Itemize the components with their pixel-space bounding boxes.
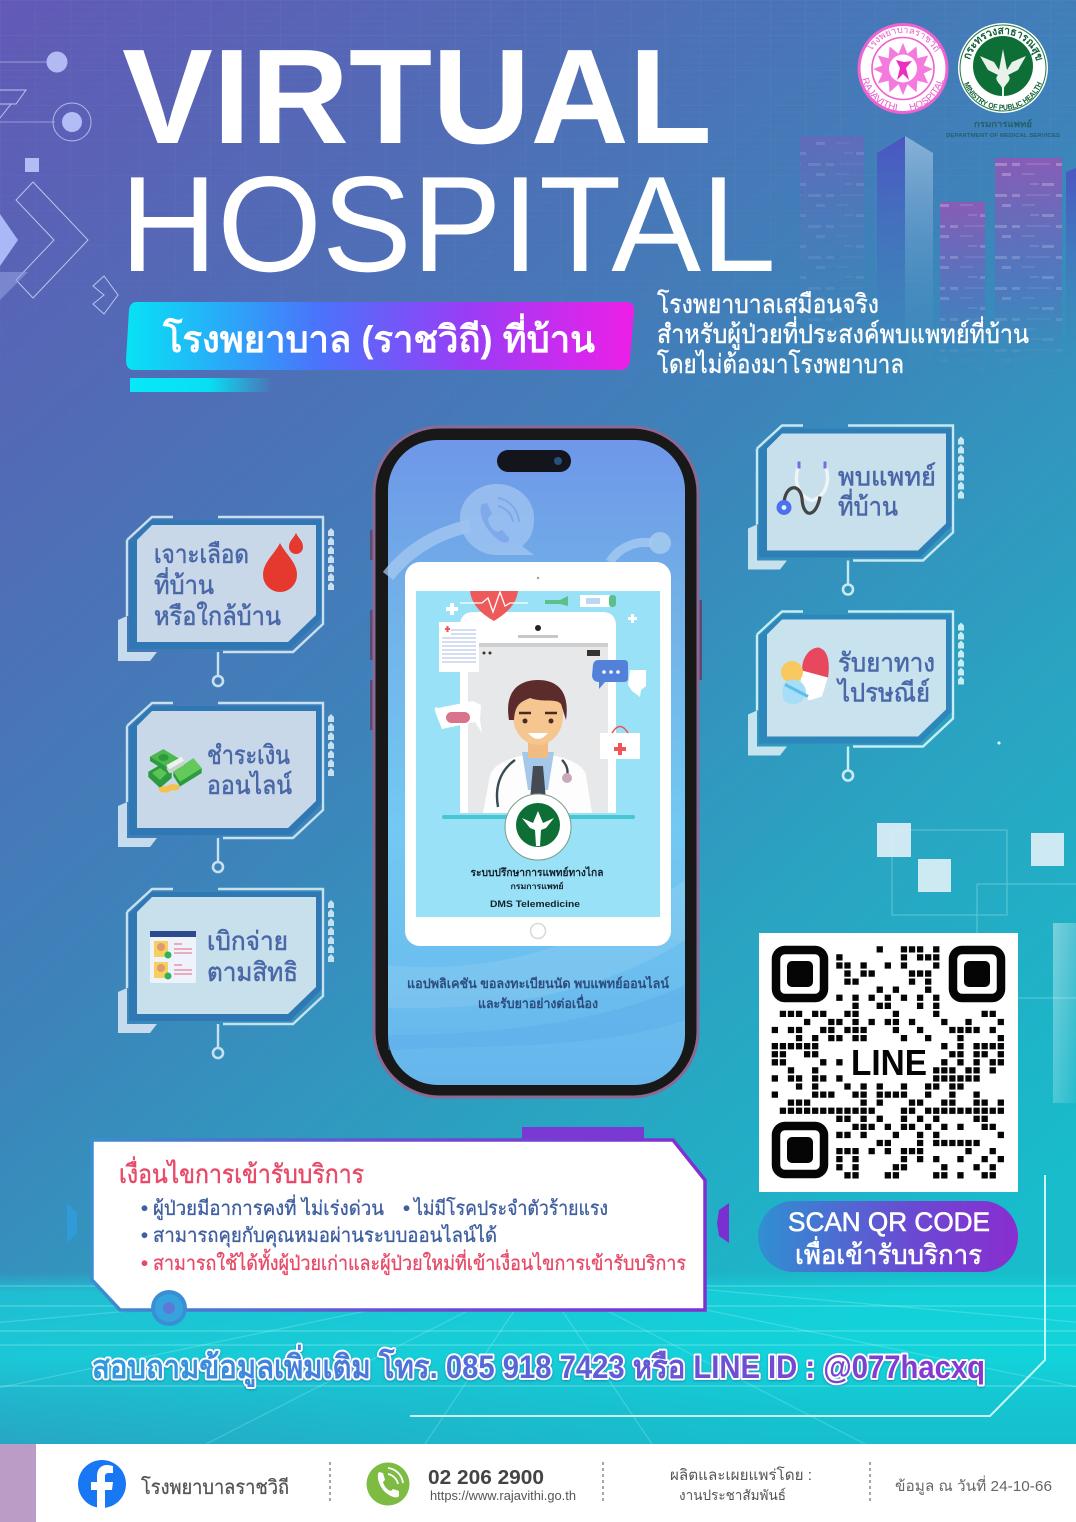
title	[120, 21, 776, 300]
title: VIRTUAL	[122, 21, 712, 172]
conditions list: •	[403, 1198, 410, 1220]
title: HOSPITAL	[120, 148, 776, 300]
panel: see doctor at home	[748, 426, 964, 594]
icon: blood drops	[263, 533, 303, 592]
text: see doctor at home	[838, 462, 936, 522]
conditions heading: เงื่อนไขการเข้ารับบริการ	[119, 1156, 364, 1189]
logo: Ministry of Public Health: MINISTRY OF PUBLIC HEALTH	[964, 82, 1042, 110]
panel: medicine by post	[748, 612, 964, 780]
phone	[370, 427, 702, 1097]
icon: pills	[781, 648, 829, 704]
text: reimbursement: ตามสิทธิ	[207, 957, 298, 987]
conditions list: •	[141, 1198, 148, 1220]
text: blood test: เจาะเลือด	[154, 539, 249, 569]
tablet	[405, 562, 671, 946]
text: medicine by post: รับยาทาง	[838, 648, 935, 678]
footer producer	[670, 1466, 812, 1503]
description text: โรงพยาบาลเสมือนจริง	[657, 289, 879, 319]
logo: Ministry of Public Health: กระทรวงสาธารณสุข	[964, 27, 1042, 61]
decorative tech shapes left	[0, 52, 118, 314]
icon: facebook	[78, 1460, 126, 1508]
footer producer: งานประชาสัมพันธ์	[679, 1487, 786, 1503]
panel: online payment	[118, 703, 334, 872]
text: blood test	[154, 539, 281, 631]
text: blood test: ที่บ้าน	[154, 567, 214, 600]
description text: สำหรับผู้ป่วยที่ประสงค์พบแพทย์ที่บ้าน	[657, 316, 1029, 350]
department name: กรมการแพทย์	[974, 118, 1032, 129]
QR modules	[772, 949, 1006, 1175]
icon: stethoscope	[776, 462, 827, 515]
conditions list: •	[141, 1253, 148, 1275]
text: reimbursement	[207, 926, 298, 987]
footer date: ข้อมูล ณ วันที่ 24-10-66	[895, 1475, 1052, 1495]
text: reimbursement: เบิกจ่าย	[207, 926, 288, 956]
phone caption: และรับยาอย่างต่อเนื่อง	[478, 994, 598, 1011]
contact line: สอบถามข้อมูลเพิ่มเติม โทร. 085 918 7423 หรือ LINE ID : @077hacxq	[92, 1344, 985, 1388]
tablet text: กรมการแพทย์	[510, 881, 564, 891]
description text	[657, 289, 1029, 379]
conditions list: ผู้ป่วยมีอาการคงที่ ไม่เร่งด่วน	[153, 1194, 384, 1221]
description text: โดยไม่ต้องมาโรงพยาบาล	[657, 349, 904, 379]
icon: phone	[366, 1462, 410, 1506]
text: see doctor at home: พบแพทย์	[838, 462, 936, 492]
tablet text	[470, 866, 604, 910]
phone caption	[407, 975, 669, 1011]
doctor illustration	[483, 680, 592, 813]
decorative squares right	[877, 742, 1076, 1103]
logo: Rajavithi Hospital: HOSPITAL	[909, 80, 944, 110]
ministry seal small	[505, 794, 571, 860]
conditions list	[141, 1194, 686, 1276]
conditions list: สามารถใช้ได้ทั้งผู้ป่วยเก่าและผู้ป่วยใหม่ที่เข้าเงื่อนไขการเข้ารับบริการ	[153, 1249, 686, 1276]
logo: Rajavithi Hospital: โรงพยาบาลราชวิถี	[866, 28, 940, 52]
footer	[0, 1444, 1076, 1522]
teal desk line	[442, 815, 635, 819]
text: online payment: ชำระเงิน	[207, 740, 290, 770]
text: online payment: ออนไลน์	[207, 770, 292, 800]
text: medicine by post: ไปรษณีย์	[836, 678, 930, 708]
tablet text: ระบบปรึกษาการแพทย์ทางไกล	[470, 866, 604, 879]
scan QR button: SCAN QR CODE	[788, 1207, 990, 1237]
floating icons	[435, 591, 646, 759]
panel: reimbursement	[118, 889, 334, 1058]
text: blood test: หรือใกล้บ้าน	[154, 601, 281, 631]
conditions list: ไม่มีโรคประจำตัวร้ายแรง	[412, 1197, 608, 1220]
logo: Ministry of Public Health	[958, 23, 1048, 113]
screen background swooshes	[388, 484, 685, 1050]
QR finder patterns	[776, 950, 1001, 1174]
conditions list: •	[141, 1225, 148, 1247]
decorative outline bottom right	[410, 1175, 1045, 1416]
scan QR button: เพื่อเข้ารับบริการ	[795, 1236, 982, 1270]
tablet inner device	[460, 612, 616, 813]
text: see doctor at home: ที่บ้าน	[838, 488, 898, 522]
phone notch	[497, 450, 571, 472]
footer phone and website: https://www.rajavithi.go.th	[430, 1489, 576, 1503]
scan QR button	[758, 1201, 1018, 1272]
footer phone and website: 02 206 2900	[428, 1467, 544, 1489]
conditions circle marker	[151, 1290, 187, 1326]
footer page name: โรงพยาบาลราชวิถี	[141, 1476, 289, 1499]
phone caption: แอปพลิเคชัน ขอลงทะเบียนนัด พบแพทย์ออนไลน์	[407, 975, 669, 991]
logo: Rajavithi Hospital: RAJAVITHI	[862, 78, 898, 110]
subtitle pill: โรงพยาบาล (ราชวิถี) ที่บ้าน	[162, 313, 595, 360]
tablet text: DMS Telemedicine	[490, 899, 580, 910]
footer phone and website	[428, 1467, 576, 1503]
footer producer: ผลิตและเผยแพร่โดย :	[670, 1466, 812, 1484]
subtitle pill	[126, 302, 634, 370]
icon: patient cards	[150, 931, 196, 983]
panel: blood test	[118, 517, 334, 686]
QR code	[759, 933, 1018, 1192]
icon: money	[148, 749, 202, 792]
logo: Rajavithi Hospital	[858, 23, 948, 114]
department name	[946, 118, 1060, 139]
accent bar	[130, 378, 273, 392]
QR LINE wordmark: LINE	[851, 1042, 927, 1083]
conditions list: สามารถคุยกับคุณหมอผ่านระบบออนไลน์ได้	[153, 1224, 497, 1248]
decorative city buildings	[800, 136, 1076, 380]
text: online payment	[207, 740, 292, 800]
department name: DEPARTMENT OF MEDICAL SERVICES	[946, 133, 1060, 139]
text: medicine by post	[836, 648, 935, 708]
panel: conditions	[67, 1127, 729, 1326]
